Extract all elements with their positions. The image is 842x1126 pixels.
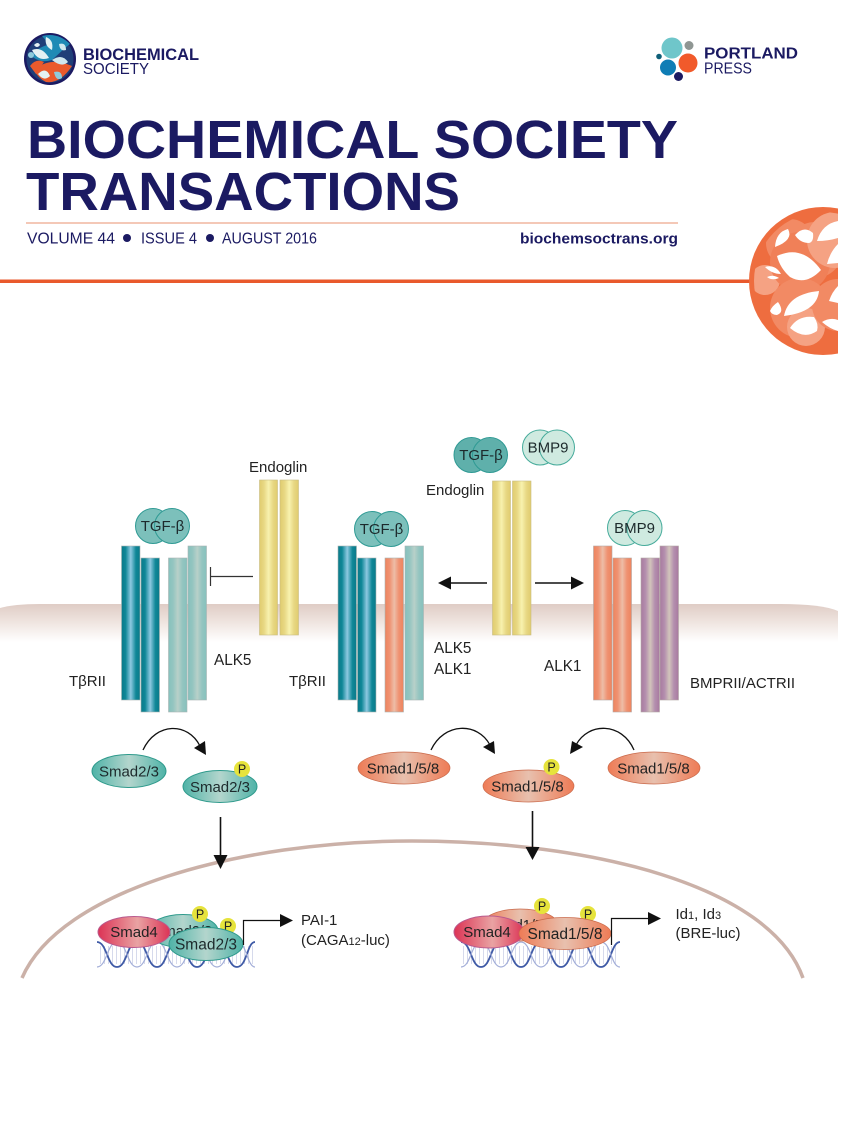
arrow: Smad1/5/8 to nucleus — [526, 811, 540, 860]
label: PAI-1 — [301, 912, 390, 949]
arrow: Smad2/3 to nucleus — [214, 817, 228, 869]
website: biochemsoctrans.org — [520, 230, 678, 248]
issue line: VOLUME 44 — [27, 230, 115, 248]
arrow: transcription PAI-1 — [244, 914, 293, 945]
label: PAI-1: PAI-1 — [301, 912, 337, 929]
smad complex: left nucleus — [98, 906, 243, 960]
smad: back Smad2/3 — [148, 914, 218, 948]
phosphate: front: P — [224, 920, 232, 934]
arrow: transcription Id1 Id3 — [612, 912, 661, 945]
inhibition line — [210, 567, 253, 586]
smad: phosphorylated Smad1/5/8: P — [547, 760, 556, 774]
label: PAI-1: (CAGA12-luc) — [301, 932, 390, 949]
smad: Smad4: Smad4 — [110, 924, 158, 941]
arrow: to middle complex — [438, 576, 487, 590]
smad: back Smad2/3: Smad2/3 — [154, 924, 212, 940]
phosphate: front — [580, 906, 596, 922]
logo text: Press: PRESS — [704, 60, 752, 78]
label: ALK5 ALK1 middle: ALK5 — [434, 640, 471, 657]
label: TβRII middle: TβRII — [289, 673, 326, 690]
logo text: Biochemical: BIOCHEMICAL — [83, 46, 199, 64]
title: TRANSACTIONS — [26, 162, 460, 222]
label: Id1 Id3 — [676, 906, 741, 942]
phosphate: back — [534, 898, 550, 914]
smad: phosphorylated Smad2/3: Smad2/3 — [190, 779, 250, 796]
smad: Smad2/3 unphosphorylated — [92, 754, 166, 788]
cell membrane — [0, 604, 838, 642]
icon: Portland Press dots — [656, 38, 698, 81]
smad: Smad1/5/8 right — [608, 752, 700, 784]
smad complex: right nucleus — [454, 898, 611, 950]
logo: Portland Press — [656, 38, 798, 81]
ligand: BMP9 top: BMP9 — [528, 440, 568, 456]
title — [26, 110, 678, 222]
smad: Smad1/5/8 right: Smad1/5/8 — [617, 760, 690, 778]
ligand: TGF-β top — [454, 438, 508, 472]
emblem: orange roundel — [749, 207, 838, 355]
smad: front Smad1/5/8: Smad1/5/8 — [528, 926, 602, 943]
label: Id1 Id3: Id1, Id3 — [676, 906, 721, 923]
phosphate: back: P — [538, 900, 546, 914]
receptor complex: TβRII and ALK5 (left) — [122, 546, 206, 712]
label: BMPRII/ACTRII: BMPRII/ACTRII — [690, 675, 795, 692]
ligand: TGF-β top: TGF-β — [459, 447, 503, 464]
DNA helix right — [461, 942, 620, 967]
label: ALK5 ALK1 middle — [434, 640, 471, 678]
nuclear envelope — [22, 841, 803, 978]
arrow: Smad1/5/8 right phosphorylation — [570, 728, 634, 754]
issue line: AUGUST 2016 — [222, 230, 317, 248]
label: TβRII left: TβRII — [69, 673, 106, 690]
phosphate: front — [220, 918, 236, 934]
label: ALK5 left: ALK5 — [214, 652, 251, 669]
smad: Smad1/5/8 left — [358, 752, 450, 784]
label: Id1 Id3: (BRE-luc) — [676, 925, 741, 942]
smad: phosphorylated Smad1/5/8 — [483, 759, 574, 802]
smad: back Smad1/5/8 — [482, 909, 558, 941]
arrow: to right complex — [535, 576, 584, 590]
ligand: TGF-β middle: TGF-β — [360, 521, 404, 538]
arrow: Smad1/5/8 left phosphorylation — [431, 728, 495, 754]
ligand: TGF-β left: TGF-β — [141, 518, 185, 535]
logo text: Portland: PORTLAND — [704, 46, 798, 62]
smad: front Smad2/3 — [169, 928, 243, 960]
phosphate: front: P — [584, 908, 592, 922]
DNA helix left — [97, 942, 255, 967]
smad: phosphorylated Smad2/3 — [183, 761, 257, 802]
title: BIOCHEMICAL SOCIETY — [27, 110, 678, 170]
smad: Smad4 — [98, 916, 170, 948]
logo text: Society: SOCIETY — [83, 61, 149, 78]
arrow: Smad2/3 phosphorylation — [143, 728, 206, 755]
smad: front Smad1/5/8 — [519, 918, 611, 950]
smad: Smad4: Smad4 — [463, 924, 511, 941]
ligand: BMP9 right — [608, 510, 662, 546]
smad: Smad2/3 unphosphorylated: Smad2/3 — [99, 764, 159, 780]
ligand: BMP9 top — [522, 430, 574, 465]
logo: Biochemical Society — [24, 33, 199, 85]
ligand: BMP9 right: BMP9 — [614, 520, 655, 537]
smad: Smad4 — [454, 916, 524, 948]
smad: back Smad1/5/8: Smad1/5/8 — [485, 918, 555, 934]
label: ALK5 ALK1 middle: ALK1 — [434, 661, 471, 678]
smad: Smad1/5/8 left: Smad1/5/8 — [367, 760, 439, 778]
receptor: Endoglin (left) — [260, 480, 298, 635]
receptor: Endoglin centre — [492, 481, 531, 635]
ligand: TGF-β middle — [354, 512, 408, 546]
receptor complex: TβRII and ALK5/ALK1 (middle) — [338, 546, 424, 712]
ligand: TGF-β left — [136, 508, 190, 544]
icon: Biochemical Society roundel — [24, 33, 76, 85]
label: Endoglin left: Endoglin — [249, 459, 307, 476]
label: Endoglin centre: Endoglin — [426, 482, 484, 499]
phosphate: back: P — [196, 908, 204, 922]
receptor complex: ALK1 and BMPRII/ACTRII (right) — [594, 546, 678, 712]
issue line — [27, 230, 317, 248]
issue line: ISSUE 4 — [141, 230, 197, 248]
phosphate: back — [192, 906, 208, 922]
smad: phosphorylated Smad2/3: P — [238, 762, 246, 776]
label: ALK1 right: ALK1 — [544, 658, 581, 675]
smad: front Smad2/3: Smad2/3 — [175, 936, 237, 954]
smad: phosphorylated Smad1/5/8: Smad1/5/8 — [491, 778, 564, 796]
